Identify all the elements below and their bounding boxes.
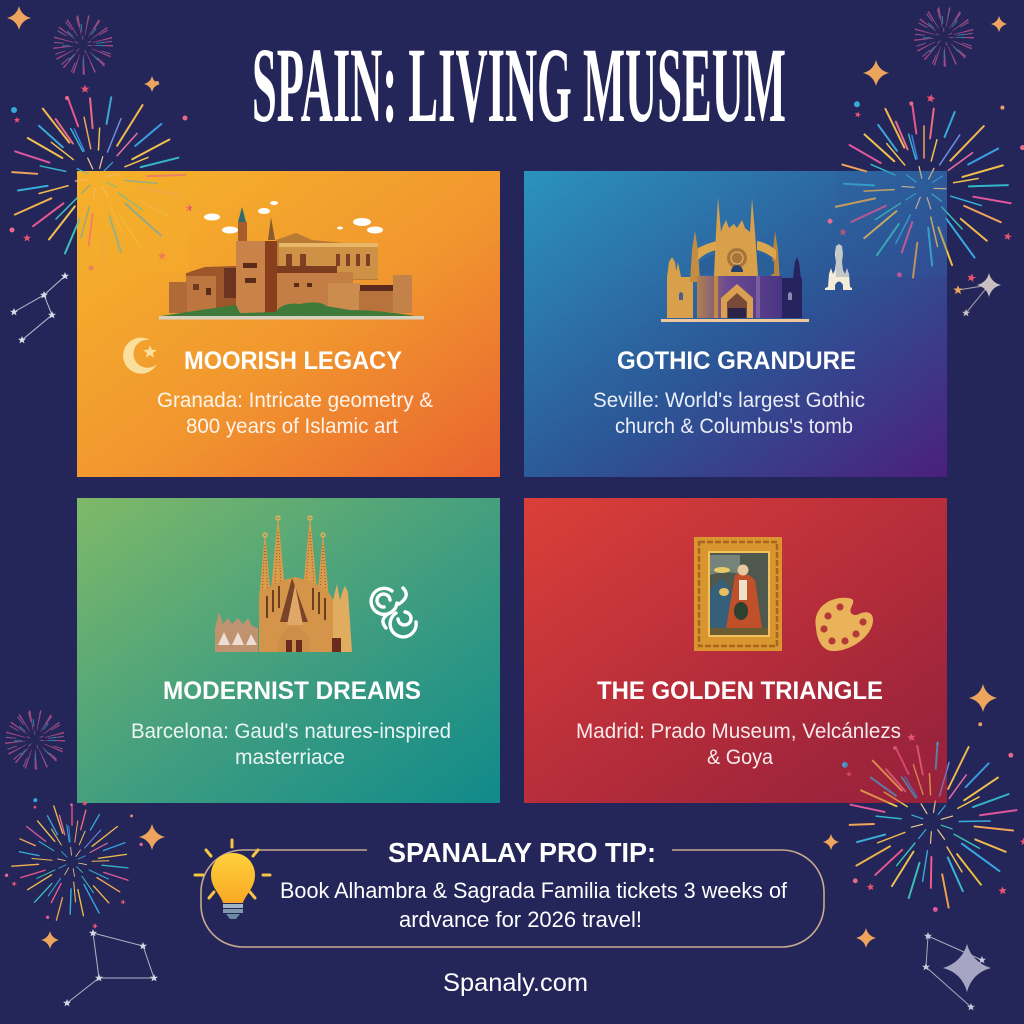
text block: Madrid: Prado Museum, Velcánlezs xyxy=(576,720,901,743)
text block: Barcelona: Gaud's natures-inspired xyxy=(131,720,451,743)
text block: church & Columbus's tomb xyxy=(615,415,853,438)
fireworks: top right xyxy=(819,75,1024,298)
tip heading: SPANALAY PRO TIP: xyxy=(388,837,656,868)
tip text xyxy=(280,878,788,932)
illustration: framed painting xyxy=(694,537,782,651)
fireworks: small top left xyxy=(59,21,107,69)
text block: masterriace xyxy=(235,746,345,769)
icon: light bulb xyxy=(195,840,270,919)
text block xyxy=(576,720,901,769)
fireworks: top left xyxy=(10,81,193,270)
heading: GOTHIC GRANDURE xyxy=(617,347,856,375)
fireworks: bottom left xyxy=(0,781,155,942)
panel: moorish legacy xyxy=(77,171,500,477)
illustration: alhambra palace xyxy=(159,201,424,320)
illustration: seville cathedral xyxy=(661,197,809,322)
footer url: Spanaly.com xyxy=(443,969,588,997)
icon: crescent and star xyxy=(123,338,157,374)
text block: Granada: Intricate geometry & xyxy=(157,389,433,412)
text block xyxy=(157,389,433,438)
text block: & Goya xyxy=(707,746,773,769)
text block: Seville: World's largest Gothic xyxy=(593,389,865,412)
icon: white swirls xyxy=(371,588,416,637)
panel: gothic grandure xyxy=(524,171,947,477)
constellation: lower right with large star xyxy=(922,932,991,1010)
heading: MOORISH LEGACY xyxy=(184,347,402,375)
constellation: lower left xyxy=(63,929,158,1006)
pill outline xyxy=(201,850,824,947)
tip text: ardvance for 2026 travel! xyxy=(399,907,642,932)
tip text: Book Alhambra & Sagrada Familia tickets 3 weeks of xyxy=(280,878,788,903)
illustration: sagrada familia xyxy=(215,515,352,652)
constellation: upper right xyxy=(953,273,1001,316)
fireworks: bottom right xyxy=(838,719,1024,920)
pro tip panel xyxy=(195,837,824,947)
fireworks: small left xyxy=(11,716,59,764)
text block xyxy=(593,389,865,438)
heading: MODERNIST DREAMS xyxy=(163,677,421,705)
text block xyxy=(131,720,451,769)
icon: white cathedral xyxy=(825,244,852,290)
panel: modernist dreams xyxy=(77,498,500,803)
text block: 800 years of Islamic art xyxy=(186,415,398,438)
heading: THE GOLDEN TRIANGLE xyxy=(597,677,883,705)
icon: palette xyxy=(815,598,873,651)
fireworks: small top right xyxy=(920,13,968,61)
constellation: upper left xyxy=(10,272,69,343)
panel: the golden triangle xyxy=(524,498,947,803)
